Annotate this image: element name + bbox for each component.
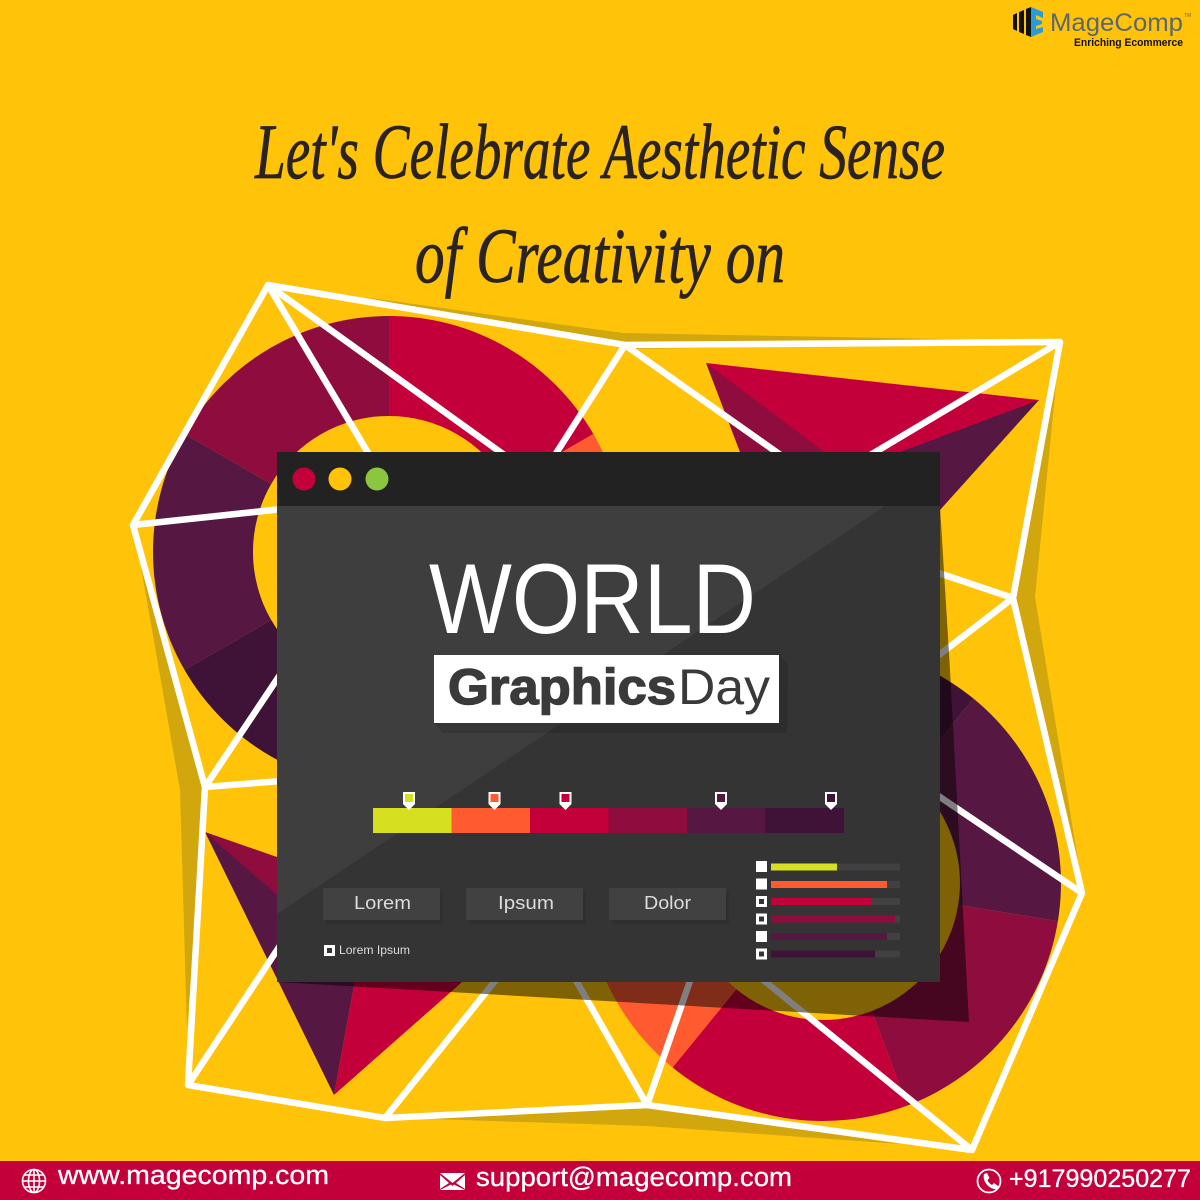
progress row: lime	[756, 861, 900, 872]
triangle: top right	[706, 363, 1039, 510]
icon: globe	[22, 1170, 46, 1192]
button: Dolor	[609, 888, 729, 924]
window body light diagonal	[277, 506, 885, 914]
donut segment: dark purple	[738, 645, 973, 777]
window control: red	[292, 468, 316, 490]
donut segment: dark red	[185, 316, 389, 484]
button: Dolor: Dolor	[644, 893, 691, 913]
banner shadow	[434, 655, 788, 733]
icon: envelope	[440, 1173, 465, 1190]
wireframe drop shadows	[138, 297, 1082, 1144]
triangle facet: red	[334, 975, 470, 1095]
window body	[277, 506, 940, 982]
palette marker: red	[560, 792, 572, 810]
logo: MageComp	[1013, 7, 1191, 49]
footer website: www.magecomp.com	[57, 1160, 329, 1190]
donut segment: dark purple	[185, 620, 389, 788]
title line 2: of Creativity on	[415, 212, 785, 299]
footer email: support@magecomp.com	[476, 1162, 792, 1192]
palette marker: dark purple	[825, 792, 837, 810]
application window	[277, 452, 940, 982]
wireframe outline	[133, 285, 1082, 1150]
logo icon	[1013, 7, 1043, 37]
window control: green	[366, 468, 388, 490]
palette marker: orange	[488, 792, 500, 810]
logo trademark: TM	[1184, 13, 1191, 19]
palette marker: lime	[403, 792, 415, 810]
progress list	[756, 861, 900, 960]
heading: WORLD: WORLD	[429, 543, 756, 654]
progress row: orange	[756, 878, 900, 890]
progress row: dark purple	[756, 948, 900, 960]
donut segment: red	[673, 989, 908, 1121]
triangle facet: dark red	[205, 832, 300, 920]
triangle facet: dark red	[706, 363, 835, 460]
donut segment: purple	[910, 698, 1061, 921]
donut segment: dark red	[872, 905, 1058, 1106]
title	[254, 108, 945, 299]
donut segment: purple	[153, 434, 271, 670]
colour palette bar	[373, 808, 844, 833]
donut segment: red	[389, 316, 593, 484]
window control: yellow	[328, 468, 352, 490]
donut chart: lower right	[585, 645, 1061, 1121]
checkbox: Lorem Ipsum: Lorem Ipsum	[339, 945, 410, 957]
donut chart: upper left	[153, 316, 625, 788]
footer bar	[0, 1160, 1200, 1200]
triangle facet: red	[706, 363, 1039, 460]
progress row: purple	[756, 931, 900, 942]
window title bar	[277, 452, 940, 506]
donut segment: orange	[507, 434, 625, 670]
triangle: bottom left	[205, 832, 470, 1095]
footer phone number: +917990250277	[1009, 1165, 1191, 1193]
logo wordmark: MageComp	[1050, 9, 1183, 37]
button: Lorem	[323, 888, 443, 924]
banner text: Day: Day	[678, 659, 770, 715]
palette marker: purple	[715, 792, 727, 810]
white wireframe polygon	[133, 285, 1082, 1150]
donut segment: orange	[585, 845, 736, 1068]
banner: Graphics Day	[434, 655, 779, 723]
icon: phone	[978, 1170, 1000, 1192]
logo tagline: Enriching Ecommerce	[1074, 37, 1183, 49]
button: Ipsum: Ipsum	[498, 893, 554, 913]
progress row: red	[756, 896, 900, 907]
triangle facet: purple	[850, 400, 1039, 510]
triangle facet: purple	[205, 832, 356, 1095]
button: Ipsum	[466, 888, 586, 924]
window drop shadow	[277, 506, 969, 1022]
wireframe inner edges	[133, 285, 1082, 1150]
button: Lorem: Lorem	[354, 893, 411, 913]
banner text: Graphics: Graphics	[448, 659, 676, 715]
progress row: dark red	[756, 914, 900, 924]
